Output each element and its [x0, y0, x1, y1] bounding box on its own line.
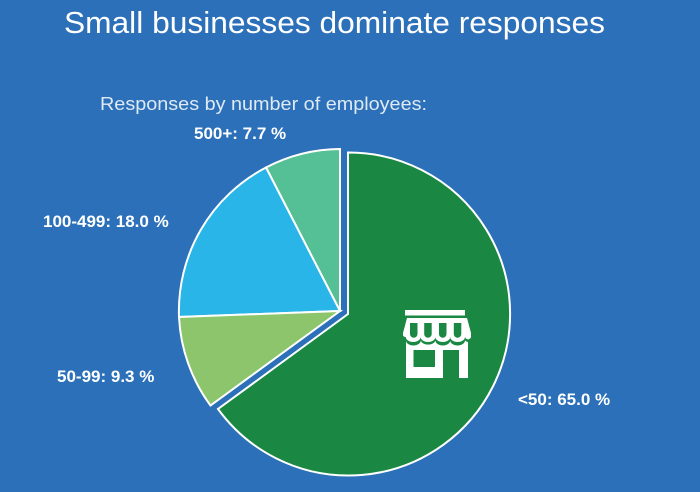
subtitle: Responses by number of employees:: [100, 94, 427, 114]
label: under 50: <50: 65.0 %: [518, 390, 610, 409]
label: 500+: 500+: 7.7 %: [194, 124, 286, 143]
label: 100-499: 100-499: 18.0 %: [43, 212, 169, 231]
slice: 100-499 18.0%: [179, 168, 340, 317]
label: 50-99: 50-99: 9.3 %: [57, 367, 154, 386]
slice: 50-99 9.3%: [179, 311, 340, 406]
slice: 500+ 7.7%: [266, 149, 340, 311]
slice: under 50 65.0%: [218, 152, 510, 475]
title: Small businesses dominate responses: [64, 6, 605, 40]
pie chart: [179, 149, 510, 475]
icon: storefront: [403, 310, 471, 378]
